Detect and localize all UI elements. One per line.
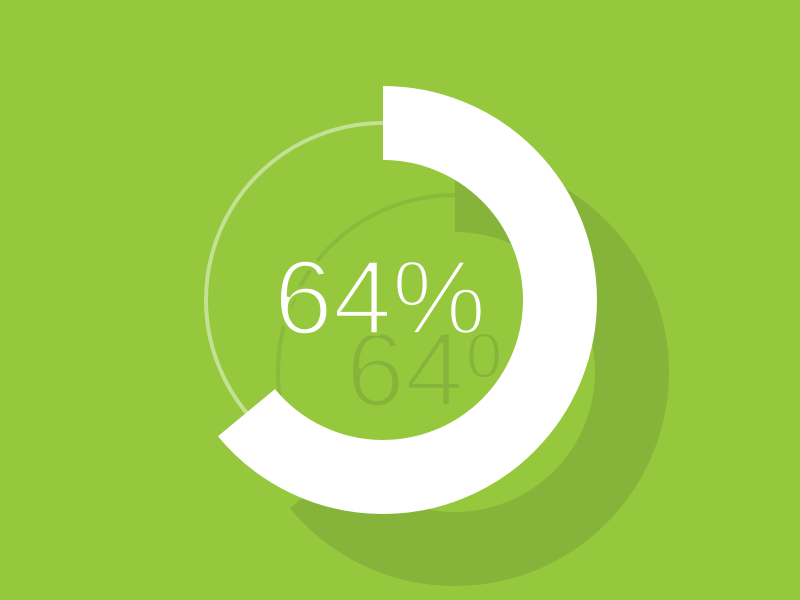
shadow: offset donut: 64%: [346, 311, 558, 429]
percentage label: 64%: [274, 239, 486, 357]
shadow: offset donut: [278, 195, 632, 549]
background track ring: [206, 123, 560, 477]
progress arc 64%: [206, 123, 560, 477]
